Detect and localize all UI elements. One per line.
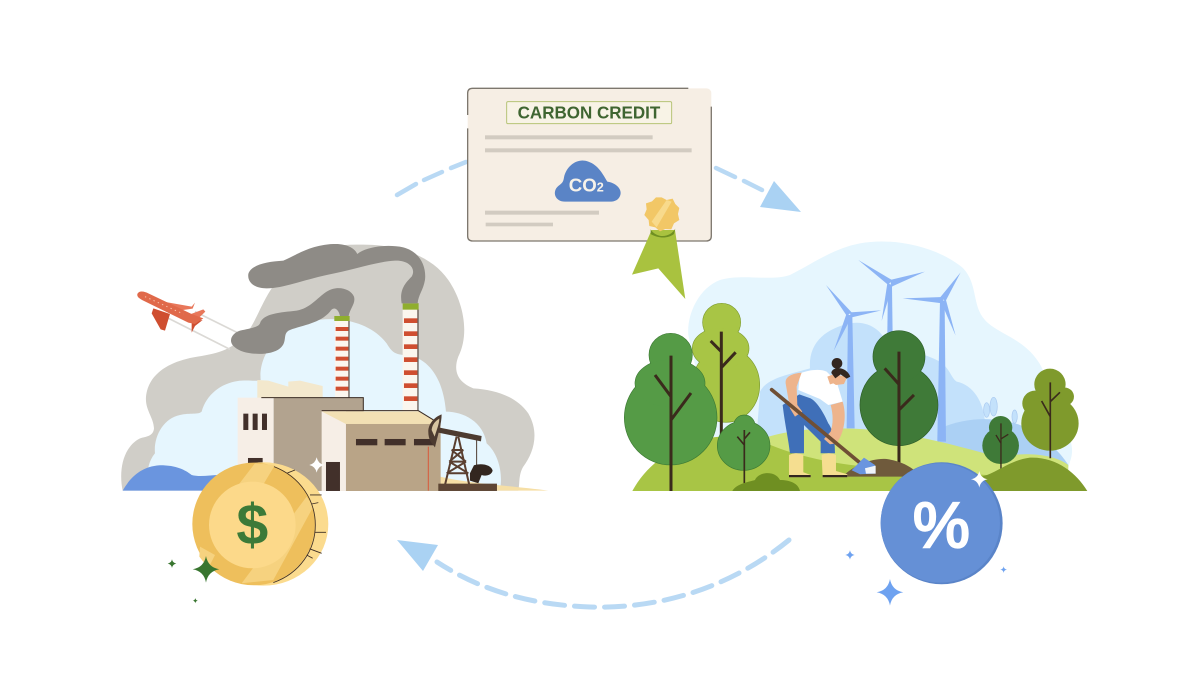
back meadow (763, 428, 1068, 491)
tree light green (692, 303, 760, 435)
pale blue cloud (147, 319, 501, 490)
shirt (798, 370, 843, 405)
dollar sign: $ (236, 493, 268, 557)
arrow: certificate to forest (716, 168, 801, 212)
icon: ribbon seal (632, 197, 685, 299)
tree dark green centre (860, 331, 938, 465)
icon: CO2 cloud (555, 160, 621, 202)
distant hill (940, 419, 1068, 465)
icon: CO2 cloud: CO2 (569, 174, 604, 195)
coin with dollar sign (192, 462, 328, 586)
sparkles green (168, 556, 219, 603)
wind turbine right (903, 272, 961, 442)
pale sky cloud (688, 241, 1072, 475)
factory roof blocks (257, 380, 323, 398)
certificate text lines (485, 135, 692, 226)
foreground hill (632, 436, 987, 491)
olive hill right (982, 458, 1087, 491)
tree green small (717, 415, 770, 483)
distant small trees (984, 397, 1017, 423)
dirt mound (843, 459, 920, 477)
airplane with contrails (137, 292, 237, 349)
chimney left (334, 316, 350, 398)
panel: polluting industry scene (121, 244, 548, 603)
panel: carbon credit certificate (468, 88, 711, 299)
trousers (783, 394, 835, 453)
coin face (192, 463, 315, 585)
wind turbine left (826, 285, 881, 428)
shovel (772, 390, 859, 462)
chimney right (403, 303, 419, 412)
head and hair (827, 374, 847, 385)
left arm (786, 373, 802, 417)
gray pollution cloud (121, 245, 534, 491)
oil pump jack (428, 414, 497, 491)
arrow: factory to certificate (397, 162, 466, 195)
factory main block (274, 398, 364, 491)
sparkles blue (845, 550, 1007, 606)
tree olive right (1021, 369, 1079, 458)
dark smoke plume lower (231, 288, 354, 354)
blue mid cloud (757, 323, 1068, 468)
factory front building (309, 411, 441, 491)
certificate card (468, 88, 711, 241)
woman digging with shovel (772, 358, 876, 477)
coin inner disc (209, 482, 296, 568)
tree green large (624, 333, 717, 491)
boots (789, 453, 847, 477)
panel: reforestation scene (624, 241, 1087, 606)
coin edge (198, 462, 328, 586)
wind turbine centre (858, 260, 925, 335)
percent badge (881, 462, 1003, 584)
blue hill (123, 465, 233, 491)
right arm (824, 402, 845, 444)
dark smoke plume upper (248, 244, 425, 303)
arrow: forest back to factory (397, 540, 789, 607)
percent badge: % (913, 489, 970, 561)
factory white tower (238, 398, 274, 491)
bush (732, 473, 800, 491)
sand ground (437, 477, 548, 491)
tree dark green small right (982, 416, 1019, 470)
heading label: carbon credit: CARBON CREDIT (518, 103, 661, 123)
